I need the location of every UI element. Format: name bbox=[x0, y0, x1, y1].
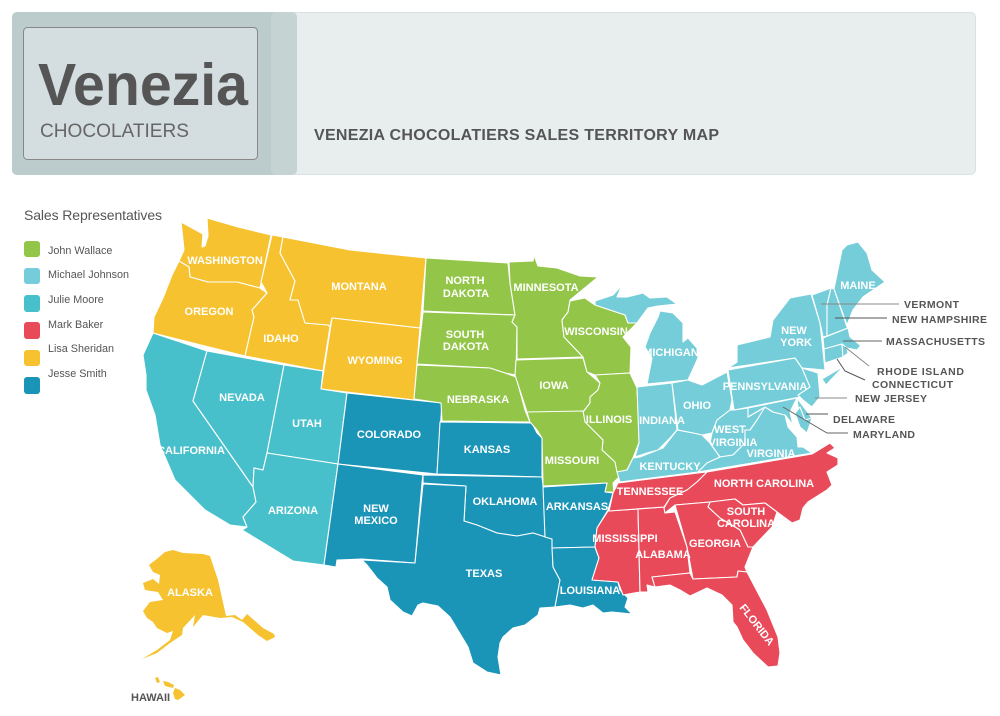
state: New Hampshire bbox=[827, 288, 848, 336]
state labels: IDAHO bbox=[263, 333, 299, 345]
state: Louisiana bbox=[552, 547, 632, 614]
callout: Connecticut: CONNECTICUT bbox=[872, 379, 954, 391]
state labels: CALIFORNIA bbox=[157, 445, 225, 457]
legend: sales representatives bbox=[24, 207, 162, 394]
legend: sales representatives: John Wallace bbox=[48, 245, 112, 257]
state: North Dakota bbox=[423, 258, 515, 315]
state: Utah bbox=[267, 365, 347, 464]
state labels: ALASKA bbox=[167, 587, 213, 599]
state labels: DAKOTA bbox=[443, 341, 489, 353]
state labels: IOWA bbox=[539, 380, 569, 392]
state: Arkansas bbox=[543, 483, 613, 548]
state labels: YORK bbox=[780, 337, 812, 349]
state: Washington bbox=[179, 218, 271, 288]
Hawaii label: HAWAII bbox=[131, 692, 170, 704]
state: Maine bbox=[834, 242, 885, 325]
state labels: ILLINOIS bbox=[586, 414, 632, 426]
callout: Maryland: MARYLAND bbox=[853, 429, 915, 441]
state: Michigan bbox=[595, 285, 698, 384]
state: Wyoming bbox=[321, 318, 420, 400]
state: Virginia bbox=[698, 407, 812, 472]
logo box: CHOCOLATIERS bbox=[40, 121, 189, 142]
state: Delaware bbox=[797, 398, 812, 420]
state: Nebraska bbox=[414, 365, 530, 422]
callout: New Jersey bbox=[815, 393, 927, 405]
callout: Delaware: DELAWARE bbox=[833, 414, 895, 426]
state: Wisconsin bbox=[562, 298, 637, 375]
state: New Mexico bbox=[324, 464, 423, 567]
state labels: NEBRASKA bbox=[447, 394, 509, 406]
state labels: MISSISSIPPI bbox=[592, 533, 658, 545]
callout: Rhode Island bbox=[845, 347, 964, 378]
state: West Virginia bbox=[710, 407, 770, 457]
state labels: FLORIDA bbox=[737, 602, 776, 648]
state labels: MAINE bbox=[840, 280, 876, 292]
state labels: ALABAMA bbox=[635, 549, 691, 561]
state: Colorado bbox=[338, 393, 442, 474]
state: Kentucky bbox=[617, 430, 720, 482]
state labels: UTAH bbox=[292, 418, 322, 430]
state labels: NEW bbox=[363, 503, 389, 515]
state: Nevada bbox=[193, 351, 284, 487]
callout: Delaware bbox=[806, 414, 895, 426]
state: Iowa bbox=[515, 358, 600, 412]
state labels: ARIZONA bbox=[268, 505, 318, 517]
state: California bbox=[143, 333, 256, 527]
state labels: WISCONSIN bbox=[564, 326, 628, 338]
state labels: MEXICO bbox=[354, 515, 398, 527]
state labels: TEXAS bbox=[466, 568, 502, 580]
state: Vermont bbox=[812, 288, 831, 337]
logo box: Venezia bbox=[38, 52, 249, 118]
state: Mississippi bbox=[592, 509, 640, 595]
title: VENEZIA CHOCOLATIERS SALES TERRITORY MAP bbox=[314, 127, 719, 144]
callout: Massachusetts: MASSACHUSETTS bbox=[886, 336, 985, 348]
state: Georgia bbox=[675, 502, 753, 579]
state: Pennsylvania bbox=[728, 358, 810, 410]
state: Alabama bbox=[638, 507, 690, 592]
state labels: NORTH bbox=[445, 275, 485, 287]
legend: sales representatives: Sales Representatives bbox=[24, 207, 162, 223]
state labels: KENTUCKY bbox=[639, 461, 701, 473]
state labels: KANSAS bbox=[464, 444, 510, 456]
northeast callouts bbox=[783, 299, 987, 441]
state: North Carolina bbox=[664, 443, 838, 523]
state labels bbox=[157, 255, 876, 648]
state labels: INDIANA bbox=[639, 415, 685, 427]
legend: sales representatives: Jesse Smith bbox=[48, 368, 107, 380]
state labels: WEST bbox=[714, 424, 746, 436]
state labels: MISSOURI bbox=[545, 455, 599, 467]
logo box bbox=[24, 28, 258, 160]
state: Texas bbox=[362, 484, 560, 675]
state labels: TENNESSEE bbox=[617, 486, 683, 498]
state labels: NEW bbox=[781, 325, 807, 337]
state: Oklahoma bbox=[423, 475, 545, 537]
state labels: OHIO bbox=[683, 400, 711, 412]
state labels: MICHIGAN bbox=[643, 347, 699, 359]
legend: sales representatives: Mark Baker bbox=[48, 319, 104, 331]
header banner bbox=[12, 12, 976, 175]
legend: sales representatives: Julie Moore bbox=[48, 294, 104, 306]
state labels: WASHINGTON bbox=[187, 255, 263, 267]
state labels: NEVADA bbox=[219, 392, 265, 404]
state labels: GEORGIA bbox=[689, 538, 741, 550]
state labels: OKLAHOMA bbox=[473, 496, 537, 508]
state labels: DAKOTA bbox=[443, 288, 489, 300]
state: South Dakota bbox=[417, 312, 517, 375]
state labels: MINNESOTA bbox=[513, 282, 579, 294]
legend: sales representatives: Michael Johnson bbox=[48, 269, 129, 281]
callout: Vermont: VERMONT bbox=[904, 299, 960, 311]
state: Hawaii bbox=[155, 677, 185, 700]
state: Idaho bbox=[245, 235, 330, 371]
state: Rhode Island bbox=[842, 344, 848, 357]
state: New Jersey bbox=[798, 368, 820, 407]
callout: Vermont bbox=[821, 299, 960, 311]
state: Maryland bbox=[748, 398, 812, 433]
state: Oregon bbox=[153, 261, 267, 356]
state labels: SOUTH bbox=[446, 329, 484, 341]
state: Illinois bbox=[583, 373, 640, 472]
state labels: OREGON bbox=[185, 306, 233, 318]
state: Connecticut bbox=[824, 344, 843, 363]
state: New York bbox=[728, 294, 844, 385]
state labels: VIRGINIA bbox=[747, 448, 795, 460]
state: Alaska bbox=[142, 550, 275, 659]
state: Massachusetts bbox=[823, 328, 863, 350]
map of states bbox=[142, 218, 885, 700]
state: Missouri bbox=[527, 411, 623, 492]
state: Kansas bbox=[437, 422, 542, 477]
state: Arizona bbox=[242, 453, 338, 565]
state labels: COLORADO bbox=[357, 429, 422, 441]
callout: New Jersey: NEW JERSEY bbox=[855, 393, 927, 405]
callout: Rhode Island: RHODE ISLAND bbox=[877, 366, 964, 378]
callout: New Hampshire: NEW HAMPSHIRE bbox=[892, 314, 987, 326]
state labels: ARKANSAS bbox=[546, 501, 608, 513]
state labels: VIRGINIA bbox=[709, 437, 757, 449]
state labels: PENNSYLVANIA bbox=[723, 381, 807, 393]
state labels: SOUTH bbox=[727, 506, 765, 518]
state labels: LOUISIANA bbox=[560, 585, 620, 597]
state: Tennessee bbox=[609, 472, 707, 511]
state: Minnesota bbox=[509, 255, 598, 359]
state: Ohio bbox=[672, 372, 732, 435]
state labels: MONTANA bbox=[331, 281, 387, 293]
state labels: CAROLINA bbox=[717, 518, 775, 530]
callout: Maryland bbox=[783, 407, 915, 441]
callout: Connecticut bbox=[837, 359, 954, 391]
state: Florida bbox=[652, 571, 780, 667]
legend: sales representatives: Lisa Sheridan bbox=[48, 343, 114, 355]
state labels: WYOMING bbox=[348, 355, 402, 367]
state labels: NORTH CAROLINA bbox=[714, 478, 814, 490]
state: Montana bbox=[280, 237, 426, 328]
state: South Carolina bbox=[708, 499, 777, 547]
state: Indiana bbox=[635, 383, 677, 457]
